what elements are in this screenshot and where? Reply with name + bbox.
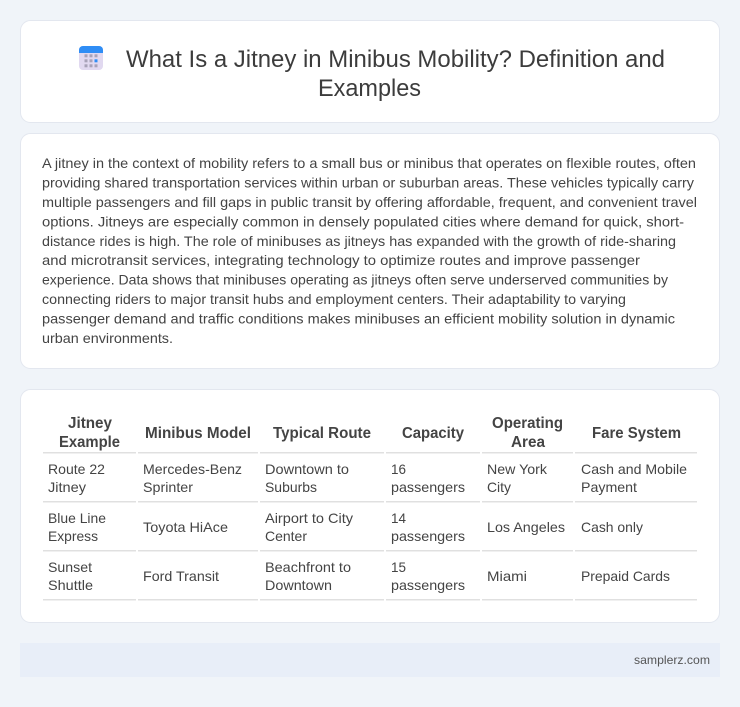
table header: Operating — [492, 415, 563, 432]
text block: description paragraph: providing shared transportation services within urban or suburban areas. These vehicles typically carry — [42, 174, 694, 190]
table row: Route 22 Jitney: New York — [487, 461, 548, 477]
footer: samplerz.com — [634, 653, 710, 667]
table row: Sunset Shuttle: Miami — [487, 568, 527, 584]
table row: Sunset Shuttle: passengers — [391, 577, 465, 593]
table row: Sunset Shuttle: 15 — [391, 559, 406, 575]
text block: description paragraph: experience. Data shows that minibuses operating as jitneys often serve underserved communities by — [42, 272, 668, 288]
table row: Route 22 Jitney: Sprinter — [143, 479, 193, 495]
table row: Route 22 Jitney: passengers — [391, 479, 465, 495]
text block: description paragraph: passenger demand and traffic conditions makes minibuses an efficient mobility solution in dynamic — [42, 311, 675, 327]
table row: Route 22 Jitney: Route 22 — [48, 461, 105, 477]
table row: Blue Line Express: Express — [48, 528, 98, 544]
table header: Jitney — [68, 415, 112, 432]
table row: Blue Line Express: Center — [265, 528, 307, 544]
table header: Minibus Model — [145, 425, 251, 442]
table row: Blue Line Express: Cash only — [581, 519, 643, 535]
table row: Blue Line Express: passengers — [391, 528, 465, 544]
text block: description paragraph: multiple passengers and fill gaps in public transit by offering affordable, frequent, and convenient travel — [42, 194, 697, 210]
table row: Sunset Shuttle — [48, 559, 670, 593]
title — [126, 46, 665, 102]
table row: Blue Line Express: Airport to City — [265, 510, 353, 526]
title: Examples — [318, 75, 421, 102]
panel: title card — [20, 20, 720, 122]
table row: Route 22 Jitney: Mercedes-Benz — [143, 461, 242, 477]
panel: description — [20, 134, 720, 368]
table row: Route 22 Jitney: City — [487, 479, 511, 495]
table row: Route 22 Jitney: Suburbs — [265, 479, 317, 495]
panel: table card — [20, 390, 720, 622]
text block: description paragraph: A jitney in the context of mobility refers to a small bus or minibus that operates on flexible routes, often — [42, 155, 696, 171]
table row: Sunset Shuttle: Shuttle — [48, 577, 93, 593]
table header: Fare System — [592, 425, 681, 442]
title: What Is a Jitney in Minibus Mobility? Definition and — [126, 46, 665, 73]
table header: Capacity — [402, 425, 464, 442]
text block: description paragraph: options. Jitneys are especially common in densely populated cities where demand for quick, short- — [42, 213, 684, 229]
table row: Sunset Shuttle: Downtown — [265, 577, 332, 593]
text block: description paragraph: urban environments. — [42, 330, 173, 346]
table row: Blue Line Express: Toyota HiAce — [143, 519, 228, 535]
table row: Sunset Shuttle: Beachfront to — [265, 559, 351, 575]
table header: Example — [59, 434, 120, 451]
table row: Sunset Shuttle: Prepaid Cards — [581, 568, 670, 584]
text block: description paragraph: and microtransit services, integrating technology to optimize routes and improve passenger — [42, 252, 640, 268]
icon: calendar — [79, 46, 103, 70]
table row: Blue Line Express: 14 — [391, 510, 406, 526]
table row: Sunset Shuttle: Sunset — [48, 559, 92, 575]
footer — [20, 643, 720, 677]
table row: Route 22 Jitney: 16 — [391, 461, 406, 477]
table row: Blue Line Express — [48, 510, 643, 544]
table row: Route 22 Jitney — [48, 461, 687, 495]
table header: Typical Route — [273, 425, 371, 442]
table row: Route 22 Jitney: Downtown to — [265, 461, 349, 477]
table row: Sunset Shuttle: Ford Transit — [143, 568, 219, 584]
table header — [59, 415, 681, 451]
text block: description paragraph: distance rides is high. The role of minibuses as jitneys has expanded with the growth of ride-sharing — [42, 233, 676, 249]
text block: description paragraph: connecting riders to major transit hubs and employment centers. Their adaptability to varying — [42, 291, 626, 307]
table row: Route 22 Jitney: Jitney — [48, 479, 86, 495]
text block: description paragraph — [42, 155, 697, 346]
table row: Route 22 Jitney: Payment — [581, 479, 637, 495]
table row: Blue Line Express: Los Angeles — [487, 519, 565, 535]
table header: Area — [511, 434, 545, 451]
table row lines — [43, 452, 697, 600]
table row: Blue Line Express: Blue Line — [48, 510, 106, 526]
table row: Route 22 Jitney: Cash and Mobile — [581, 461, 687, 477]
